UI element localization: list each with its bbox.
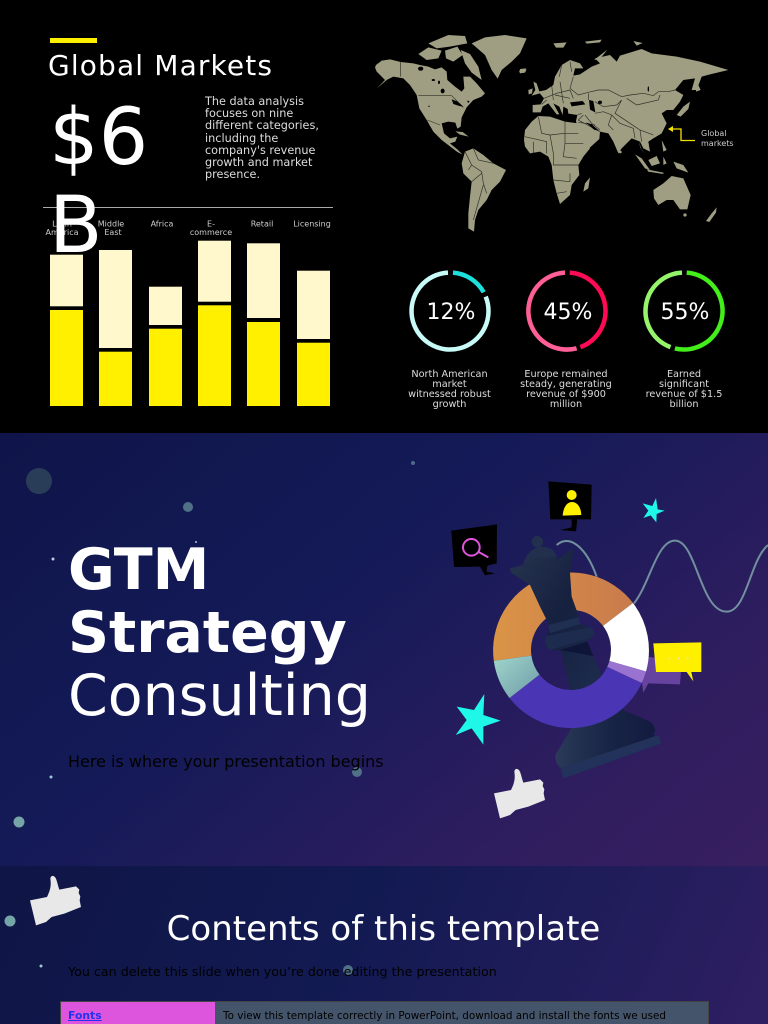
caption: North America: growth <box>433 399 466 410</box>
bar labels: Middle <box>98 220 124 228</box>
ring: 12%: 12% <box>427 300 475 325</box>
bar: Retail <box>247 243 280 406</box>
description: different categories, <box>205 119 319 132</box>
icon: thumbs up <box>494 769 545 818</box>
icon: queen base <box>555 697 662 778</box>
map: Americas north <box>375 35 527 155</box>
map label <box>701 129 734 148</box>
icon: small star <box>643 498 665 522</box>
bar labels <box>46 220 331 237</box>
caption: significant revenue: revenue of $1.5 <box>646 389 722 400</box>
bar labels: Africa <box>151 220 174 228</box>
description: company's revenue <box>205 144 315 157</box>
bar labels: Retail <box>251 220 273 228</box>
bar labels: America <box>46 228 79 237</box>
big value: $6 <box>49 93 148 183</box>
bar labels: East <box>104 228 122 237</box>
icon: purple speech shadow <box>642 657 682 693</box>
caption: significant revenue: Earned <box>667 368 701 380</box>
bar labels: Licensing <box>293 220 331 228</box>
bar chart <box>46 220 331 406</box>
caption: significant revenue <box>646 368 722 410</box>
title: Strategy <box>68 600 347 666</box>
bar: E-commerce <box>198 241 231 406</box>
bar labels: E- <box>207 220 215 228</box>
yellow accent bar <box>50 38 97 43</box>
ring: 45%: 45% <box>544 300 592 325</box>
bar: Licensing <box>297 271 330 406</box>
icon: thumbs up <box>30 876 81 926</box>
table cell: Fonts: Fonts <box>68 1009 102 1022</box>
caption: Europe <box>520 368 612 410</box>
heading: Contents of this template <box>167 909 600 949</box>
caption: North America <box>408 368 491 410</box>
icon: person bubble <box>548 481 592 531</box>
world map <box>375 35 728 232</box>
illustration: chess queen and donut <box>451 481 768 818</box>
caption: Europe: steady, generating <box>520 379 612 390</box>
wave line <box>557 541 768 612</box>
description: The data analysis <box>205 95 304 108</box>
big value <box>49 93 148 271</box>
title: GTM <box>68 537 209 603</box>
icon: large star <box>456 694 501 745</box>
map: southern continents <box>462 116 717 232</box>
title <box>68 537 371 729</box>
icon: queen body <box>510 536 602 690</box>
ring: 55%: 55% <box>661 300 709 325</box>
ring: 55% <box>643 270 725 352</box>
description: presence. <box>205 168 260 181</box>
subtitle: Here is where your presentation begins <box>68 752 384 771</box>
table cell: Fonts <box>61 1002 215 1024</box>
bar labels: Latin <box>52 220 72 228</box>
description: including the <box>205 132 278 145</box>
caption: North America: witnessed robust <box>408 389 491 400</box>
particles <box>14 461 415 828</box>
icon: yellow speech bubble <box>653 642 701 681</box>
caption: Europe: Europe remained <box>524 368 608 380</box>
intro text: You can delete this slide when you’re done editing the presentation <box>68 964 497 979</box>
donut chart <box>493 572 649 728</box>
table text: To view this template correctly in PowerPoint, download and install the fonts we used <box>223 1010 666 1022</box>
description <box>204 95 319 181</box>
heading: Global Markets <box>48 49 273 82</box>
caption: Europe: million <box>550 399 582 410</box>
big value: B <box>49 181 103 271</box>
caption: North America: North American <box>411 368 488 380</box>
bar labels: commerce <box>190 228 232 237</box>
table <box>61 1002 708 1024</box>
ring: 12% <box>409 270 491 352</box>
caption: significant revenue: billion <box>670 399 698 410</box>
map: Eurasia <box>520 40 728 153</box>
caption: significant revenue: significant <box>659 379 709 390</box>
particles <box>4 916 353 975</box>
title: Consulting <box>68 663 371 729</box>
icon: search bubble <box>451 524 497 575</box>
icon: yellow arrow to market <box>668 126 695 142</box>
map label: markets <box>701 139 734 148</box>
panel: contents slide <box>0 866 768 1024</box>
ring: 45% <box>526 270 608 352</box>
description: growth and market <box>205 156 312 169</box>
panel: global markets slide <box>0 0 768 433</box>
map label: Global <box>701 129 727 138</box>
bar: Africa <box>149 287 182 406</box>
description: focuses on nine <box>205 107 293 120</box>
panel: title slide <box>0 433 768 866</box>
bar: Latin America <box>50 255 83 406</box>
caption: Europe: revenue of $900 <box>526 389 606 400</box>
caption: North America: market <box>432 379 467 390</box>
bar: Middle East <box>99 250 132 406</box>
